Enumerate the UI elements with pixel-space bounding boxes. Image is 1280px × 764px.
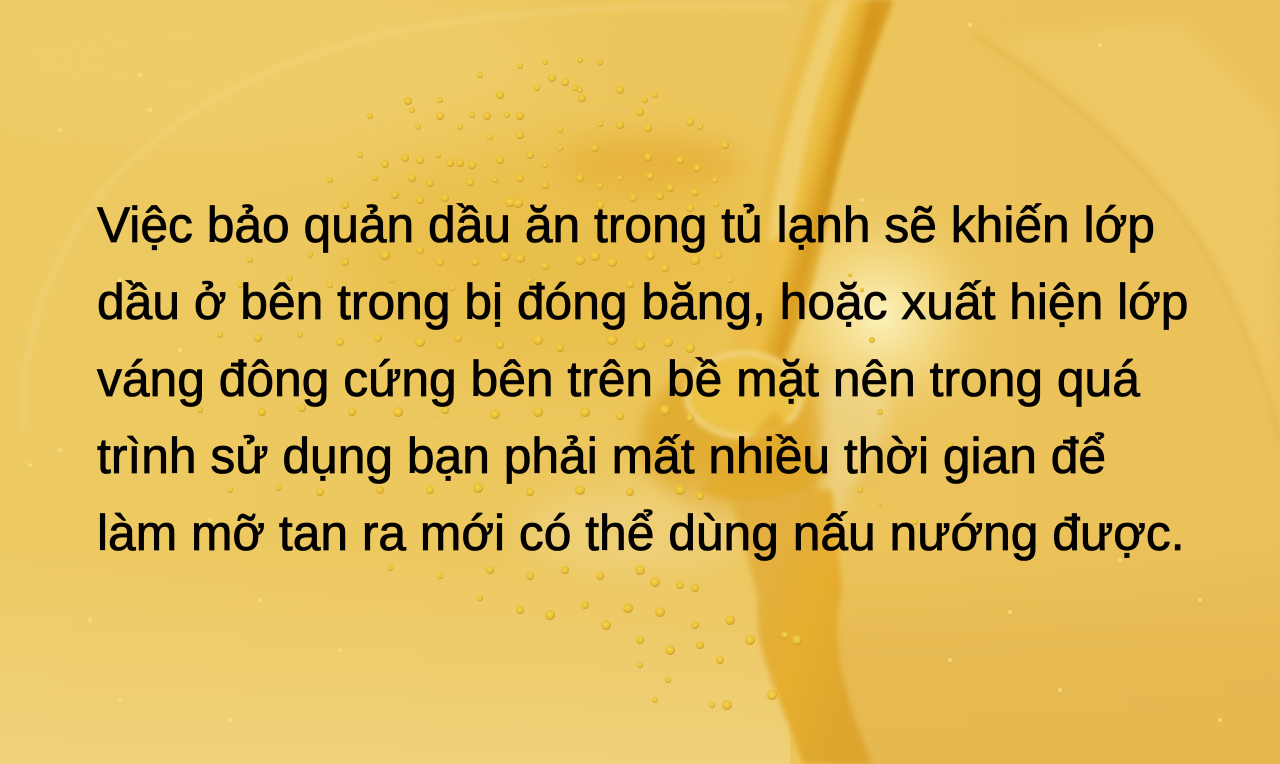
right-side sheen <box>1000 20 1280 430</box>
orange core behind bubbles <box>555 139 745 191</box>
centre pour point <box>686 353 802 437</box>
bright glow <box>740 180 1020 450</box>
text block: oil storage advice: làm mỡ tan ra mới có thể dùng nấu nướng được. <box>97 505 1185 561</box>
pale lower-left pool <box>0 540 790 764</box>
central amber region <box>640 355 880 525</box>
oil stream upper <box>712 0 893 390</box>
lens glint <box>700 410 830 501</box>
ripple ring, dark arc on right <box>975 35 1280 440</box>
text block: oil storage advice: Việc bảo quản dầu ăn trong tủ lạnh sẽ khiến lớp <box>97 197 1155 253</box>
text block: oil storage advice: váng đông cứng bên trên bề mặt nên trong quá <box>97 351 1140 407</box>
stream highlight <box>768 0 850 240</box>
ripple ring, large pale arc <box>22 5 790 430</box>
pale halo around the centre <box>520 485 760 575</box>
text block: oil storage advice: dầu ở bên trong bị đóng băng, hoặc xuất hiện lớp <box>97 274 1188 330</box>
text block: oil storage advice: trình sử dụng bạn phải mất nhiều thời gian để <box>97 428 1106 484</box>
oil stream lower <box>730 490 873 764</box>
stream dark right edge <box>815 0 892 230</box>
amber lower-right pool <box>830 540 1280 764</box>
text block: oil storage advice <box>96 197 1188 561</box>
bubbles <box>197 57 953 710</box>
pale top-left edge <box>0 0 560 150</box>
